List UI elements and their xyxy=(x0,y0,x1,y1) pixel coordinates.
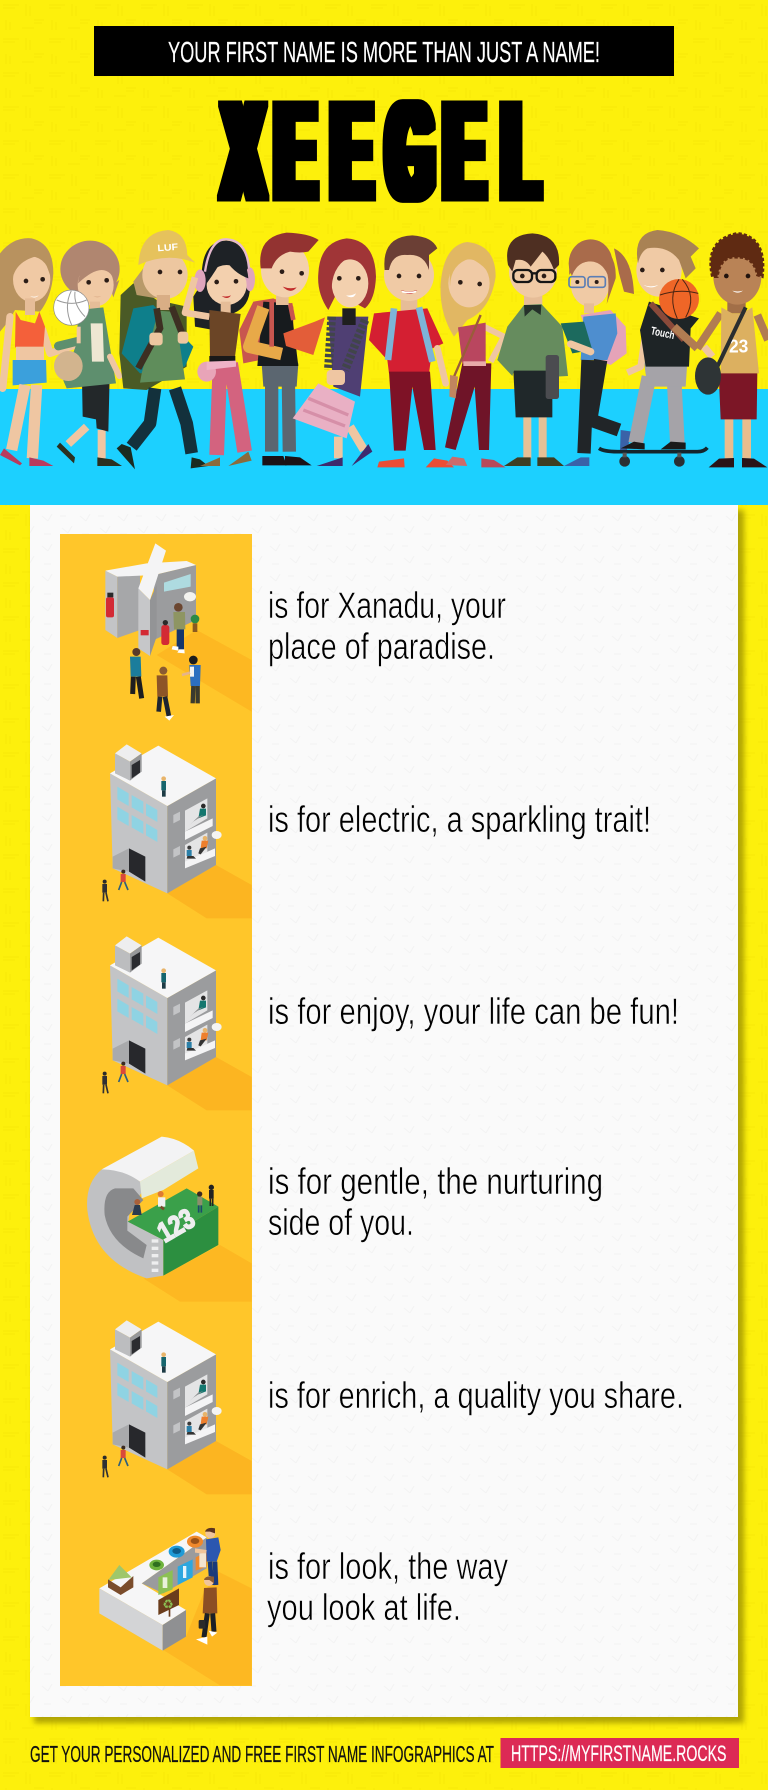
boy reading a book xyxy=(239,233,325,465)
potted plant xyxy=(191,615,199,632)
person in brown jacket xyxy=(157,667,174,721)
text row 2: E: is for electric, a sparkling trait! xyxy=(268,798,651,840)
text row 1: X xyxy=(268,584,506,667)
illustration: building E row 5 xyxy=(102,1320,252,1494)
orange column xyxy=(60,534,252,1686)
girl with ponytail and tablet xyxy=(561,239,634,466)
girl with headphones xyxy=(185,239,255,466)
boy in tank top with shoulder bag xyxy=(674,233,768,467)
text row 6: L: you look at life. xyxy=(267,1586,461,1628)
text row 4: G: side of you. xyxy=(268,1201,414,1243)
boy in tank top with shoulder bag: 23 xyxy=(729,336,748,357)
content panel xyxy=(30,505,744,1723)
illustration: G building: 123 xyxy=(152,1203,200,1248)
boy on skateboard with basketball: Touch xyxy=(650,325,676,342)
illustration: X building xyxy=(105,543,252,721)
boy with backpack and cap xyxy=(117,230,208,469)
person in khaki shirt xyxy=(172,603,185,653)
text row 1: X: is for Xanadu, your xyxy=(268,584,506,626)
people group left xyxy=(0,230,376,469)
person in blue vest xyxy=(182,656,201,703)
person in blue shirt xyxy=(195,1528,221,1585)
text row 6: L xyxy=(267,1545,508,1628)
boy on skateboard with basketball xyxy=(599,230,712,467)
person in brown jacket xyxy=(196,1576,217,1645)
blue floor band xyxy=(0,389,768,505)
illustration: building E row 3 xyxy=(102,936,252,1110)
blonde girl xyxy=(440,242,506,467)
text row 1: X: place of paradise. xyxy=(268,625,495,667)
illustration: G building xyxy=(87,1137,252,1302)
text row 4: G xyxy=(268,1160,603,1243)
girl in green jacket with volleyball xyxy=(54,241,122,466)
girl in orange top xyxy=(0,238,78,466)
people group right xyxy=(369,230,768,467)
text row 6: L: is for look, the way xyxy=(268,1545,508,1587)
title: XEEGEL xyxy=(224,75,538,228)
illustration: L recycling station: ♻ xyxy=(162,1596,174,1611)
header banner xyxy=(94,26,674,76)
text row 4: G: is for gentle, the nurturing xyxy=(268,1160,603,1202)
girl with red hair and pink bag xyxy=(293,238,376,466)
illustration: building E row 2 xyxy=(102,744,252,918)
person in teal xyxy=(130,648,142,698)
boy with backpack and cap: LUF xyxy=(157,242,179,253)
illustration: L recycling station xyxy=(99,1528,252,1685)
boy with glasses and green sweater xyxy=(497,233,568,466)
boy in red shirt xyxy=(369,235,454,467)
